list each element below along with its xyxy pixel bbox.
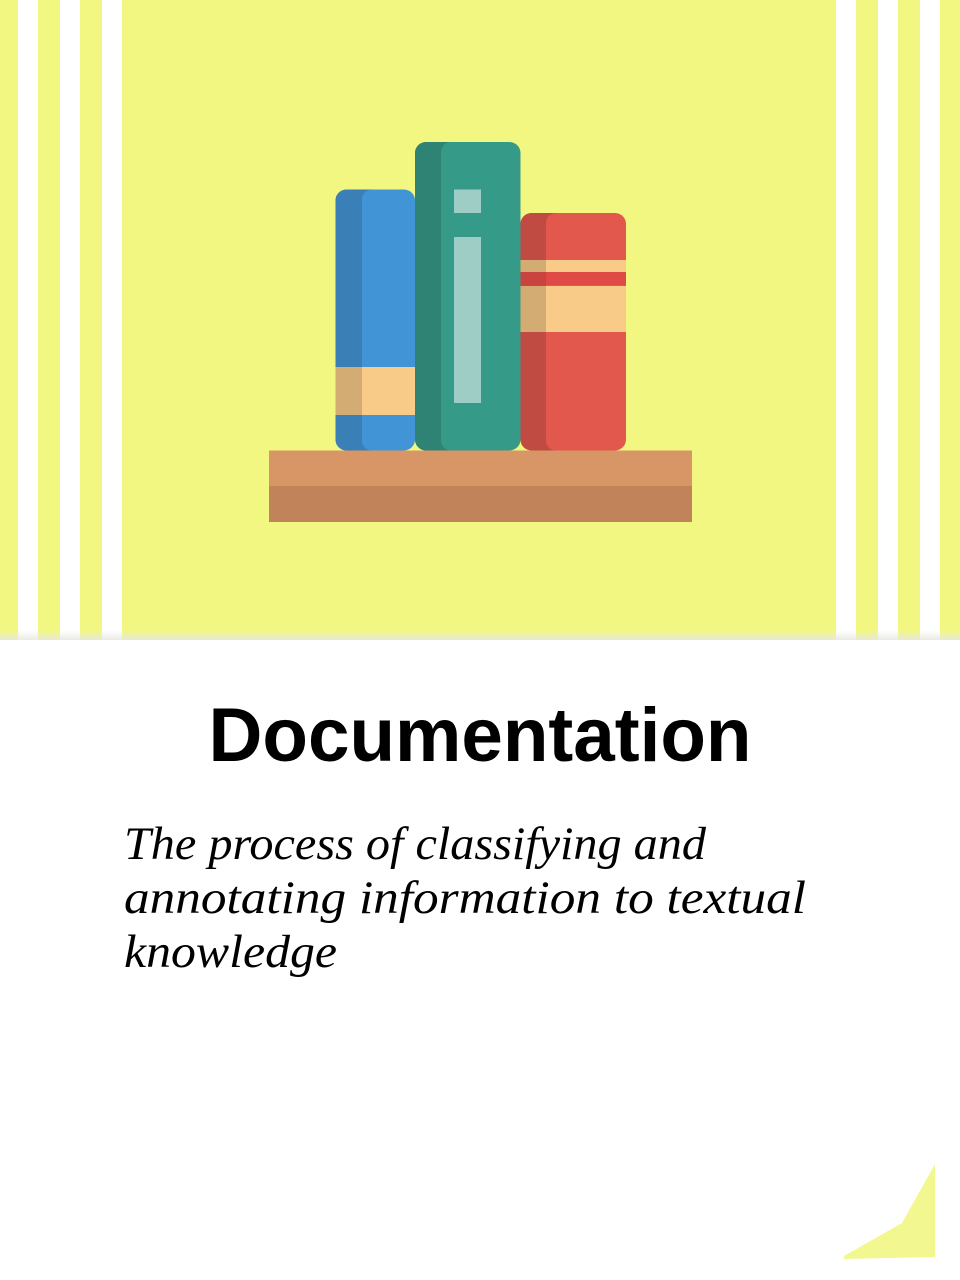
book: blue [336,190,415,450]
text block: definition: knowledge [124,926,337,978]
book: red [520,213,626,450]
book: teal [415,142,520,450]
text block: definition [124,818,806,978]
text block: definition: The process of classifying and [124,818,707,870]
text block: definition: annotating information to textual [124,872,806,924]
heading: Documentation: Documentation [208,693,752,778]
panel: striped yellow banner [0,0,960,640]
shelf [269,450,692,522]
icon: books on a shelf [269,142,692,522]
decoration: folded yellow corner [844,1164,935,1259]
